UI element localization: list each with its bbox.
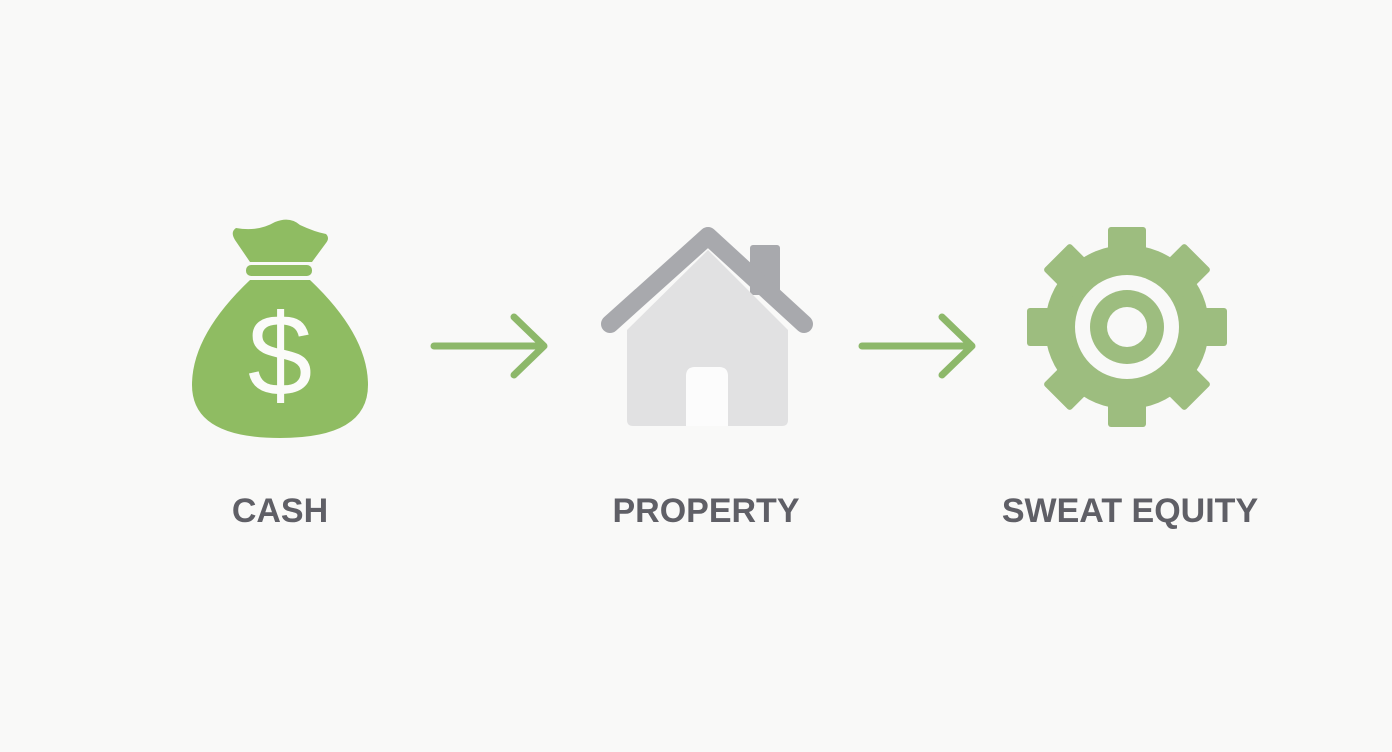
label: property: PROPERTY	[612, 492, 800, 530]
arrow 2	[862, 317, 972, 375]
icon: house	[610, 236, 804, 426]
label: sweat equity: SWEAT EQUITY	[1002, 492, 1258, 530]
icon: money bag	[192, 220, 368, 438]
icon: gear	[1027, 227, 1227, 427]
icon: money bag: $	[248, 290, 312, 420]
arrow 1	[434, 317, 544, 375]
label: cash: CASH	[232, 492, 328, 530]
